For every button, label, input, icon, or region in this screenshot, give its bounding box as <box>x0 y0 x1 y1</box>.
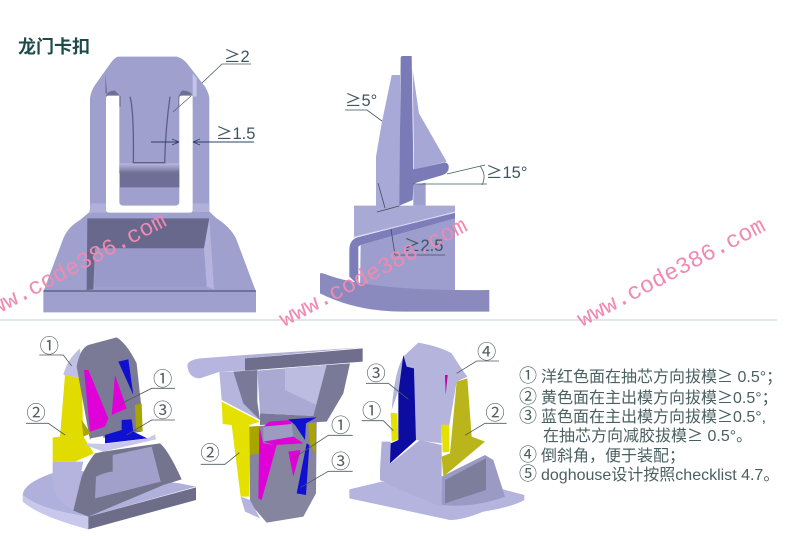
label 1 <box>293 415 353 458</box>
label 2 <box>465 403 507 435</box>
label 4 <box>457 341 499 373</box>
notes text block: ③ <box>519 406 537 426</box>
label 3: ③ <box>153 400 172 422</box>
label 2: ② <box>485 403 505 425</box>
notes text block: ① <box>519 366 537 386</box>
notes text block: ④ <box>519 445 537 465</box>
dimension: min 15 degrees: ≥15° <box>486 159 527 183</box>
watermark right: www.code386.com <box>573 213 770 333</box>
label 1: ① <box>362 400 381 422</box>
label 1 upper left <box>39 335 72 366</box>
lower-middle colored view <box>187 347 363 523</box>
notes text block: 蓝色面在主出模方向拔模≥0.5°, <box>541 403 766 427</box>
label 3 <box>127 400 175 435</box>
label 4: ④ <box>477 341 496 363</box>
dimension: min 1.5 <box>151 96 255 145</box>
front view of clip <box>43 57 256 312</box>
label 2: ② <box>200 443 220 465</box>
notes text block: 在抽芯方向减胶拔模≥ 0.5°。 <box>543 422 752 446</box>
label 3: ③ <box>366 363 386 385</box>
notes text block: 倒斜角，便于装配； <box>541 447 685 465</box>
dimension: min 2.5 <box>377 183 445 256</box>
watermark middle: www.code386.com <box>275 213 472 333</box>
label 2 <box>200 443 239 465</box>
dimension: min 2: ≥2 <box>224 43 250 67</box>
label 2 <box>26 403 65 435</box>
notes text block: 洋红色面在抽芯方向拔模≥ 0.5°； <box>541 363 782 387</box>
dimension: min 2 <box>202 43 251 83</box>
title: 龙门卡扣 <box>18 37 90 57</box>
label 3 <box>301 451 353 487</box>
lower-left colored view <box>23 335 196 529</box>
label 3 <box>366 363 408 399</box>
notes text block: ② <box>519 387 537 407</box>
label 1: ① <box>331 415 350 437</box>
notes text block: doghouse设计按照checklist 4.7。 <box>541 466 779 484</box>
notes text block: 黄色面在主出模方向拔模≥0.5°； <box>541 384 778 408</box>
dimension: min 2.5: ≥2.5 <box>404 232 443 256</box>
side view of clip <box>320 56 489 312</box>
label 1 upper left: ① <box>40 335 59 357</box>
label 3: ③ <box>331 451 350 473</box>
label 1 right: ① <box>153 368 172 390</box>
dimension: min 5 degrees: ≥5° <box>345 87 377 111</box>
dimension: min 5 degrees <box>345 87 382 121</box>
notes text block <box>519 363 782 484</box>
notes text block: ⑤ <box>519 464 537 484</box>
label 1 right <box>122 368 175 403</box>
divider line <box>0 319 777 321</box>
label 2: ② <box>26 403 46 425</box>
dimension: min 15 degrees <box>413 159 527 185</box>
lower-right colored view <box>349 341 524 520</box>
dimension: min 1.5: ≥1.5 <box>216 120 255 144</box>
label 1 <box>362 400 393 431</box>
